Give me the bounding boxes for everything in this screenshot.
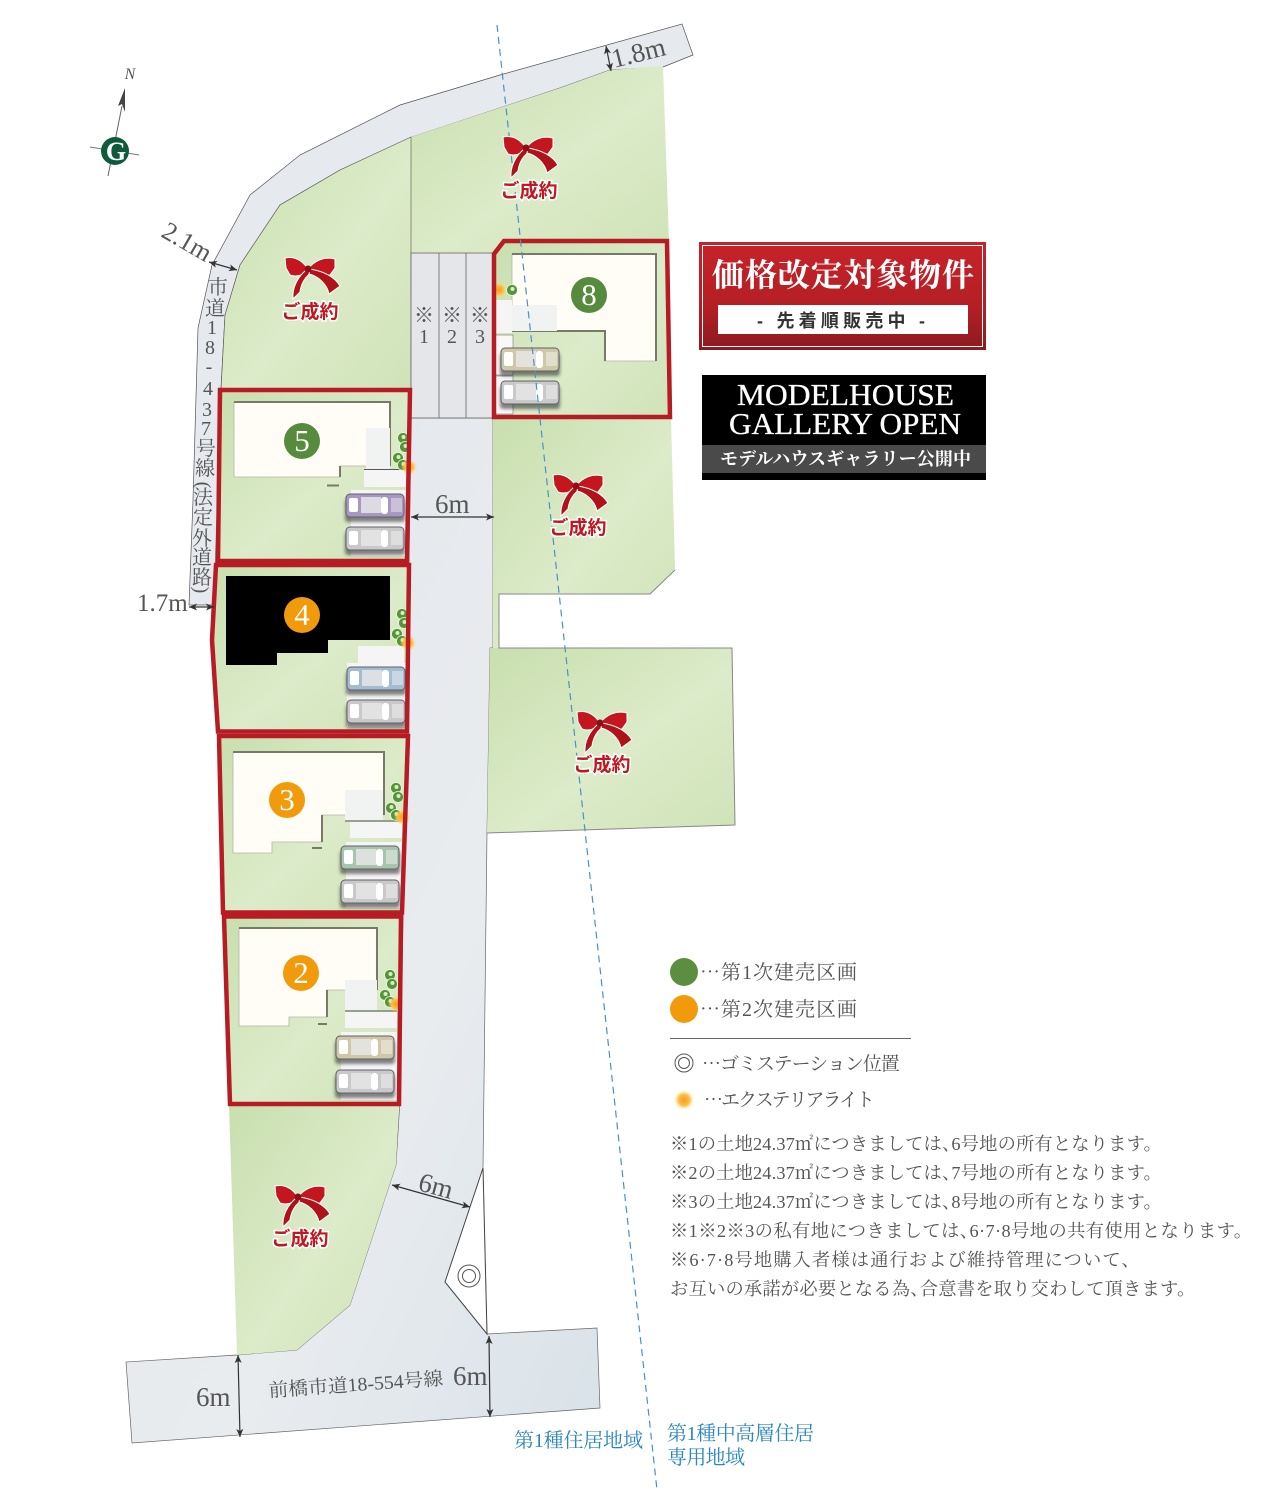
lot 5 border — [218, 390, 410, 561]
parking labels: ※ — [414, 305, 434, 327]
west road label: 1 — [207, 317, 217, 339]
west road label: 線 — [195, 457, 215, 480]
icon: garbage station — [458, 1265, 480, 1287]
dimension lower road 6m: 6m — [415, 1167, 457, 1205]
notes — [670, 1134, 1252, 1299]
lot number 4 — [284, 597, 320, 633]
west road label: 外 — [192, 527, 212, 550]
west road label: 道 — [192, 546, 212, 569]
legend — [670, 956, 911, 1112]
dimension road 6m — [411, 489, 494, 519]
notes: ※3の土地24.37㎡につきましては、8号地の所有となります。 — [670, 1192, 1162, 1212]
lot 4 — [212, 565, 416, 732]
parking labels: ※ — [442, 305, 462, 327]
lot 2 — [224, 916, 404, 1104]
west road label: 4 — [203, 378, 213, 400]
badge: model house gallery: GALLERY OPEN — [729, 406, 961, 441]
west road label: 8 — [205, 337, 215, 359]
compass: N — [124, 66, 137, 83]
legend: garbage station: …ゴミステーション位置 — [702, 1049, 900, 1076]
dimension bottom road left 6m — [196, 1355, 240, 1437]
lot: north sold — [411, 66, 669, 253]
lot number 8: 8 — [581, 277, 597, 312]
cars — [340, 846, 400, 908]
west road label: ( — [192, 482, 214, 489]
zone label right: 専用地域 — [667, 1446, 745, 1469]
lot number 8 — [571, 277, 607, 313]
garbage station triangle — [445, 1168, 487, 1334]
lot number 2: 2 — [293, 955, 309, 990]
bottom road label: 前橋市道18-554号線 — [268, 1368, 444, 1402]
dimension road 6m: 6m — [435, 489, 470, 519]
lot: east sold — [493, 418, 675, 648]
west road label: 3 — [202, 399, 212, 421]
dimension bottom road left 6m: 6m — [196, 1382, 231, 1412]
lot number 2 — [283, 955, 319, 991]
badge: model house gallery — [702, 375, 986, 480]
exterior light — [491, 282, 507, 298]
lot 8 — [491, 241, 670, 417]
west road label: ) — [190, 587, 212, 593]
zone label right: 第1種中高層住居 — [667, 1422, 814, 1445]
parking labels: ※ — [470, 305, 490, 327]
lot 8 border — [494, 241, 670, 417]
compass: G — [106, 137, 126, 166]
west road label: - — [206, 356, 212, 378]
cars — [335, 1036, 395, 1098]
lot 4 border — [212, 565, 409, 732]
dimension bottom road right 6m: 6m — [453, 1361, 488, 1391]
notch outline — [487, 570, 735, 833]
zoning boundary line — [497, 25, 657, 1490]
lot 3 — [219, 736, 410, 912]
lot: south-east sold — [487, 648, 735, 833]
exterior light — [400, 635, 416, 651]
badge: model house gallery: MODELHOUSE — [737, 377, 954, 412]
main road — [126, 418, 600, 1443]
sold ribbon east: ご成約 — [549, 516, 607, 539]
cars — [500, 348, 560, 409]
sold ribbon south: ご成約 — [271, 1227, 329, 1250]
legend: exterior light: …エクステリアライト — [704, 1085, 873, 1112]
badge: price revision: 価格改定対象物件 — [712, 257, 974, 293]
dimension 1.8m: 1.8m — [608, 31, 669, 74]
cars — [346, 667, 406, 728]
lot 5 — [218, 390, 417, 561]
dimension 1.7m: 1.7m — [137, 590, 188, 617]
notes: ※6·7·8号地購入者様は通行および維持管理について、 — [670, 1250, 1141, 1270]
exterior light — [388, 996, 404, 1012]
lot: south sold — [229, 1105, 399, 1355]
notes: ※2の土地24.37㎡につきましては、7号地の所有となります。 — [670, 1163, 1162, 1183]
west road label — [190, 276, 228, 593]
exterior light — [394, 809, 410, 825]
sold ribbon north-west — [281, 257, 340, 323]
parking labels: 1 — [419, 326, 429, 348]
sold ribbon east — [549, 474, 608, 539]
lot number 5: 5 — [294, 423, 310, 458]
sold ribbon south-east — [573, 711, 632, 776]
parking labels: 2 — [447, 326, 457, 348]
dimension 1.7m — [137, 590, 214, 617]
lot number 4: 4 — [294, 597, 310, 632]
lot 2 border — [224, 916, 401, 1104]
west road label: 7 — [201, 418, 211, 440]
west road label: 定 — [193, 506, 213, 529]
zone label right — [667, 1422, 814, 1469]
badge: price revision — [699, 242, 986, 350]
lot number 3 — [269, 782, 305, 818]
sold ribbon south-east: ご成約 — [573, 753, 631, 776]
sold ribbon north — [500, 136, 558, 202]
notes: ※1※2※3の私有地につきましては、6·7·8号地の共有使用となります。 — [670, 1221, 1252, 1241]
zone label left: 第1種住居地域 — [514, 1429, 643, 1452]
lot number 5 — [284, 423, 320, 459]
badge: price revision: - 先着順販売中 - — [757, 311, 925, 331]
lot 3 border — [219, 736, 408, 912]
sold ribbon south — [271, 1185, 330, 1250]
dimension bottom road right 6m — [453, 1336, 490, 1417]
lot: north-west sold — [221, 137, 411, 390]
notes: ※1の土地24.37㎡につきましては、6号地の所有となります。 — [670, 1134, 1162, 1154]
west road label: 路 — [192, 566, 212, 589]
lot number 3: 3 — [279, 782, 295, 817]
west road label: 法 — [193, 486, 214, 509]
legend: second phase: …第2次建売区画 — [700, 993, 858, 1022]
dimension lower road 6m — [392, 1167, 470, 1207]
parking labels — [414, 305, 490, 348]
cars — [345, 494, 405, 555]
notes: お互いの承諾が必要となる為、合意書を取り交わして頂きます。 — [670, 1279, 1196, 1299]
west road label: 号 — [196, 437, 216, 460]
legend: first phase: …第1次建売区画 — [700, 956, 858, 985]
compass — [90, 66, 139, 176]
dimension 2.1m: 2.1m — [157, 216, 217, 268]
private parking strips — [411, 253, 493, 418]
west road label: 市 — [208, 276, 228, 299]
sold ribbon north-west: ご成約 — [281, 300, 339, 323]
parking labels: 3 — [475, 326, 485, 348]
sold ribbon north: ご成約 — [500, 179, 558, 202]
top and west side road — [189, 24, 693, 605]
badge: model house gallery: モデルハウスギャラリー公開中 — [720, 449, 971, 469]
exterior light — [401, 459, 417, 475]
west road label: 道 — [205, 297, 225, 320]
